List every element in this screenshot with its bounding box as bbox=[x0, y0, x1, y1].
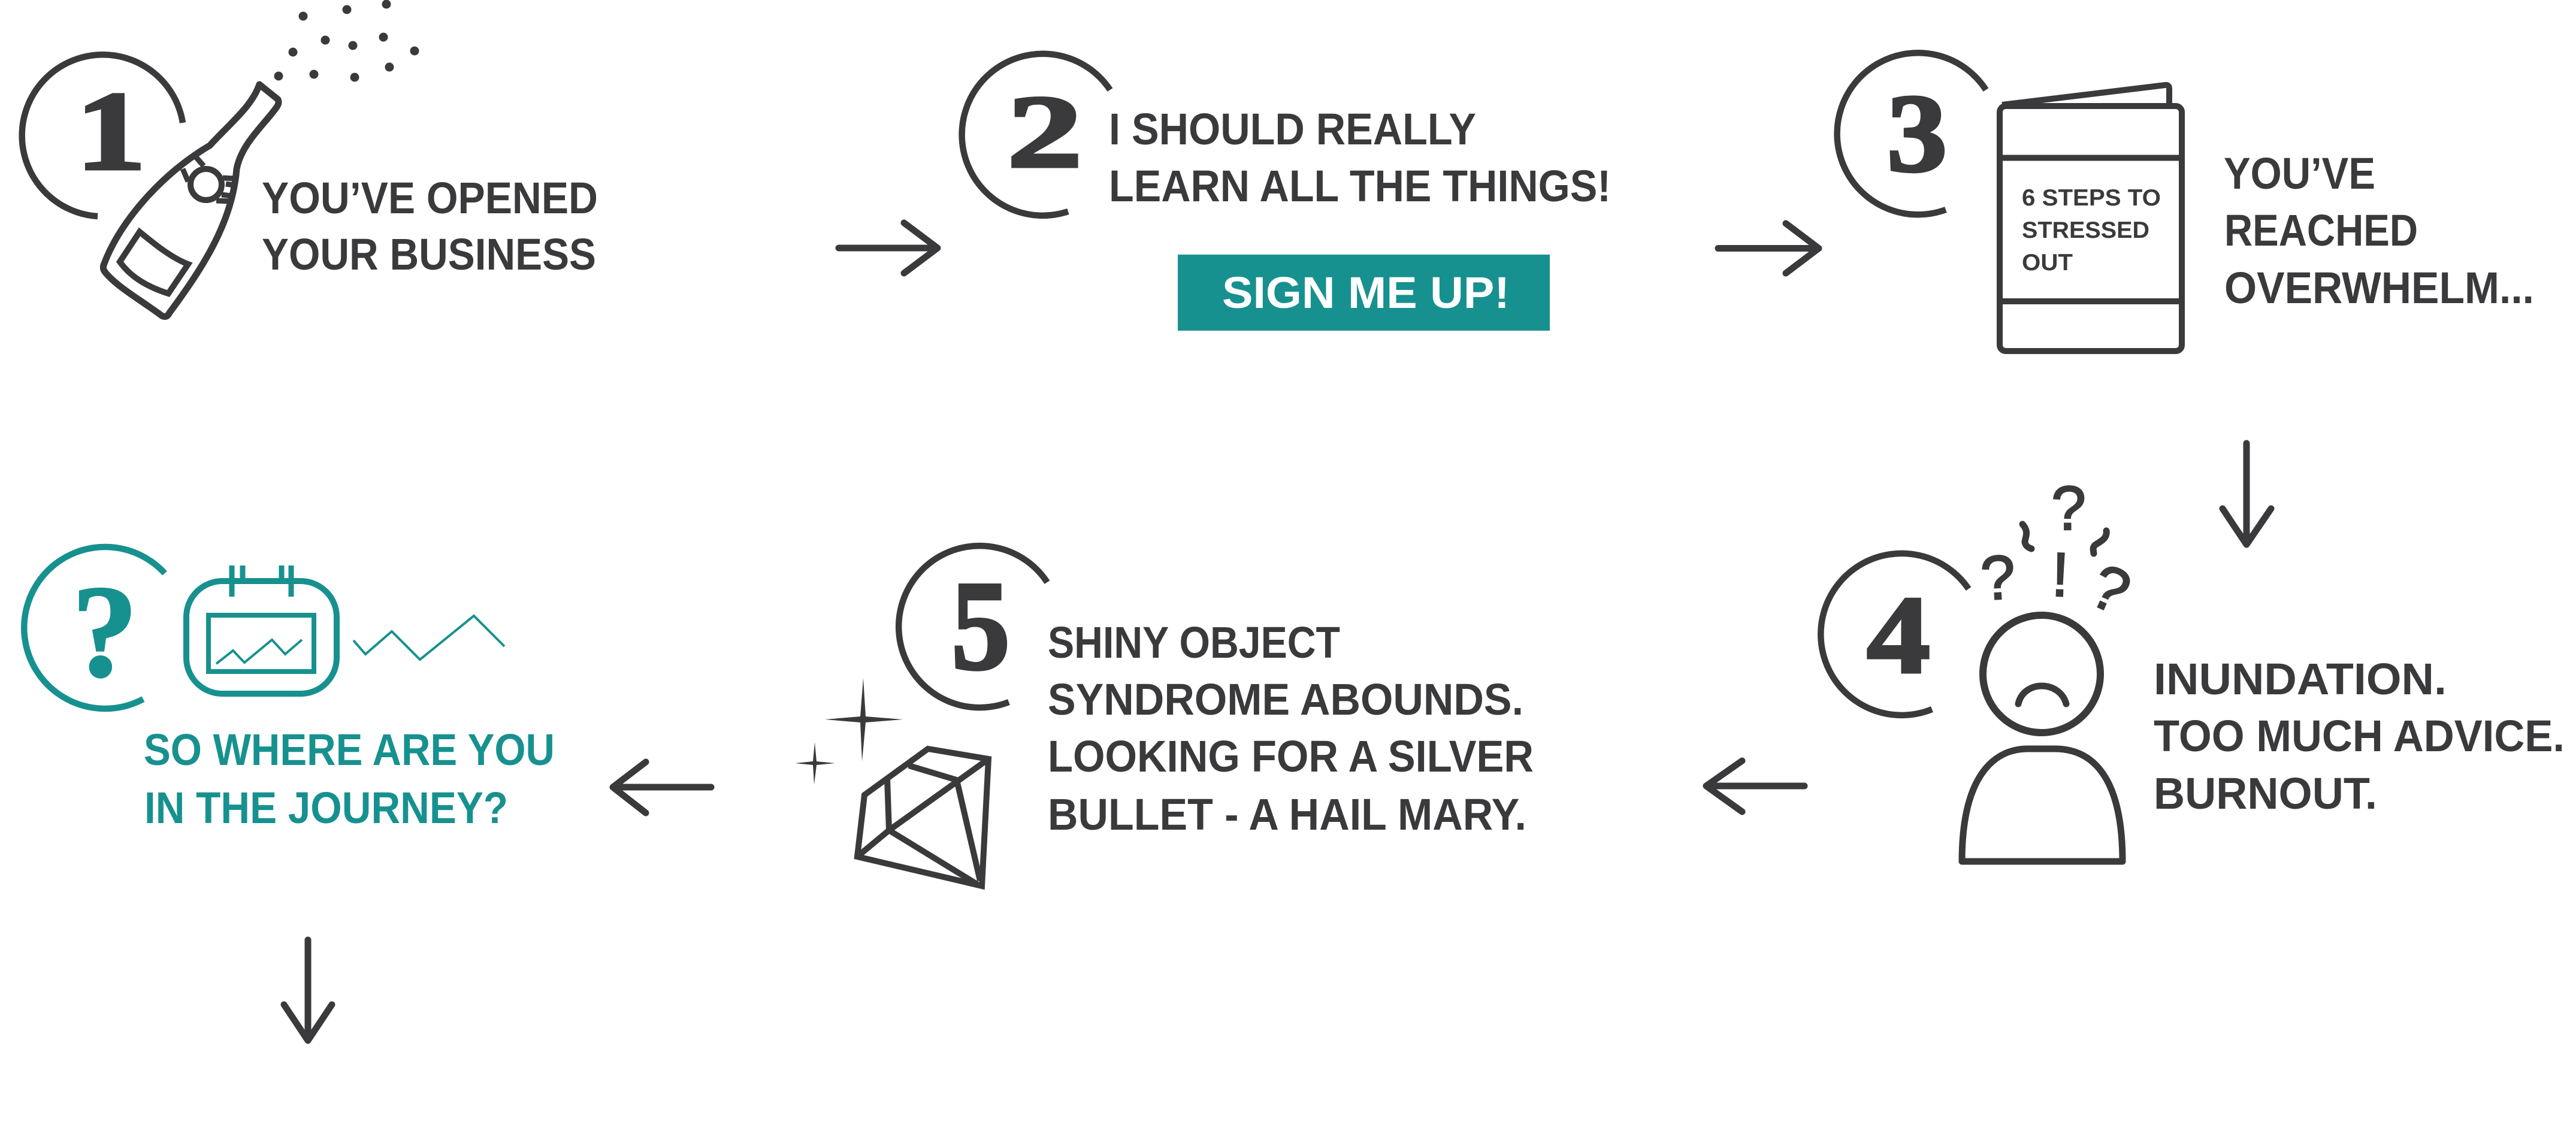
text: inundation, too much advice, burnout: TOO MUCH ADVICE. bbox=[2154, 711, 2565, 761]
text: inundation, too much advice, burnout bbox=[2154, 654, 2565, 818]
text: you've opened your business: YOUR BUSINESS bbox=[262, 229, 596, 279]
text: inundation, too much advice, burnout: BURNOUT. bbox=[2154, 769, 2377, 818]
number badge 1: 1 bbox=[75, 69, 146, 194]
text: so where are you in the journey: SO WHERE ARE YOU bbox=[144, 725, 555, 775]
text: I should really learn all the things: LEARN ALL THE THINGS! bbox=[1109, 161, 1611, 211]
button: sign me up: SIGN ME UP! bbox=[1222, 268, 1510, 317]
text: so where are you in the journey: IN THE JOURNEY? bbox=[144, 783, 508, 833]
number badge 3: 3 bbox=[1887, 71, 1947, 195]
arrow: step 5 to question bbox=[613, 762, 711, 813]
arrow: step 1 to 2 bbox=[839, 223, 938, 273]
icon: gem bbox=[857, 749, 988, 886]
number badge 1 bbox=[22, 55, 183, 216]
book cover text bbox=[2022, 185, 2161, 276]
icon: sparkles bbox=[795, 678, 903, 785]
icon: champagne bottle bbox=[103, 84, 279, 317]
number badge 2: 2 bbox=[1007, 74, 1083, 189]
text: shiny object syndrome abounds: SHINY OBJECT bbox=[1048, 618, 1340, 667]
number badge 5 bbox=[899, 546, 1047, 707]
question mark badge bbox=[24, 547, 165, 709]
step 4: inundation bbox=[1821, 474, 2565, 861]
number badge 3 bbox=[1837, 53, 1986, 214]
text: you've opened your business bbox=[262, 173, 598, 279]
text: you've reached overwhelm bbox=[2224, 149, 2534, 313]
question mark badge: ? bbox=[72, 558, 138, 704]
text: shiny object syndrome abounds: SYNDROME ABOUNDS. bbox=[1048, 675, 1523, 724]
number badge 4 bbox=[1821, 554, 1969, 715]
text: shiny object syndrome abounds bbox=[1048, 618, 1534, 839]
icon: confused person bbox=[1962, 474, 2140, 861]
arrow: step 3 to 4 bbox=[2223, 443, 2271, 545]
step 2: learn all the things bbox=[962, 54, 1611, 331]
step 1: opened your business bbox=[22, 0, 598, 317]
text: so where are you in the journey bbox=[144, 725, 555, 833]
book cover text: OUT bbox=[2022, 250, 2073, 276]
step 5: shiny object syndrome bbox=[795, 546, 1534, 886]
book cover text: STRESSED bbox=[2022, 217, 2149, 243]
text: shiny object syndrome abounds: LOOKING FOR A SILVER bbox=[1048, 731, 1534, 781]
number badge 5: 5 bbox=[951, 556, 1010, 697]
text: inundation, too much advice, burnout: INUNDATION. bbox=[2154, 654, 2447, 704]
number badge 4: 4 bbox=[1867, 573, 1930, 696]
step 3: reached overwhelm bbox=[1837, 53, 2534, 351]
icon: champagne bubbles bbox=[274, 0, 419, 81]
text: shiny object syndrome abounds: BULLET - A HAIL MARY. bbox=[1048, 790, 1526, 839]
question marks and exclamation above head: ! bbox=[2051, 540, 2070, 610]
number badge 2 bbox=[962, 54, 1110, 216]
button: sign me up bbox=[1178, 255, 1550, 331]
text: you've opened your business: YOU’VE OPENED bbox=[262, 173, 598, 223]
book cover text: 6 STEPS TO bbox=[2022, 185, 2161, 211]
arrow: step 4 to 5 bbox=[1706, 761, 1804, 812]
question marks and exclamation above head bbox=[1979, 474, 2140, 628]
icon: calendar with chart bbox=[186, 566, 337, 694]
arrow: step 2 to 3 bbox=[1718, 223, 1819, 273]
text: you've reached overwhelm: OVERWHELM... bbox=[2224, 263, 2534, 313]
text: I should really learn all the things: I SHOULD REALLY bbox=[1109, 104, 1476, 154]
question marks and exclamation above head: ? bbox=[2080, 551, 2140, 628]
arrow: down from final step bbox=[284, 940, 332, 1041]
icon: book bbox=[2000, 85, 2182, 351]
question marks and exclamation above head: ? bbox=[1979, 543, 2017, 613]
question marks and exclamation above head: ? bbox=[2051, 474, 2086, 543]
text: you've reached overwhelm: YOU’VE bbox=[2224, 149, 2375, 198]
final step: where are you in the journey bbox=[24, 547, 555, 833]
text: you've reached overwhelm: REACHED bbox=[2224, 205, 2418, 255]
icon: trend line bbox=[353, 616, 504, 660]
text: I should really learn all the things bbox=[1109, 104, 1611, 211]
